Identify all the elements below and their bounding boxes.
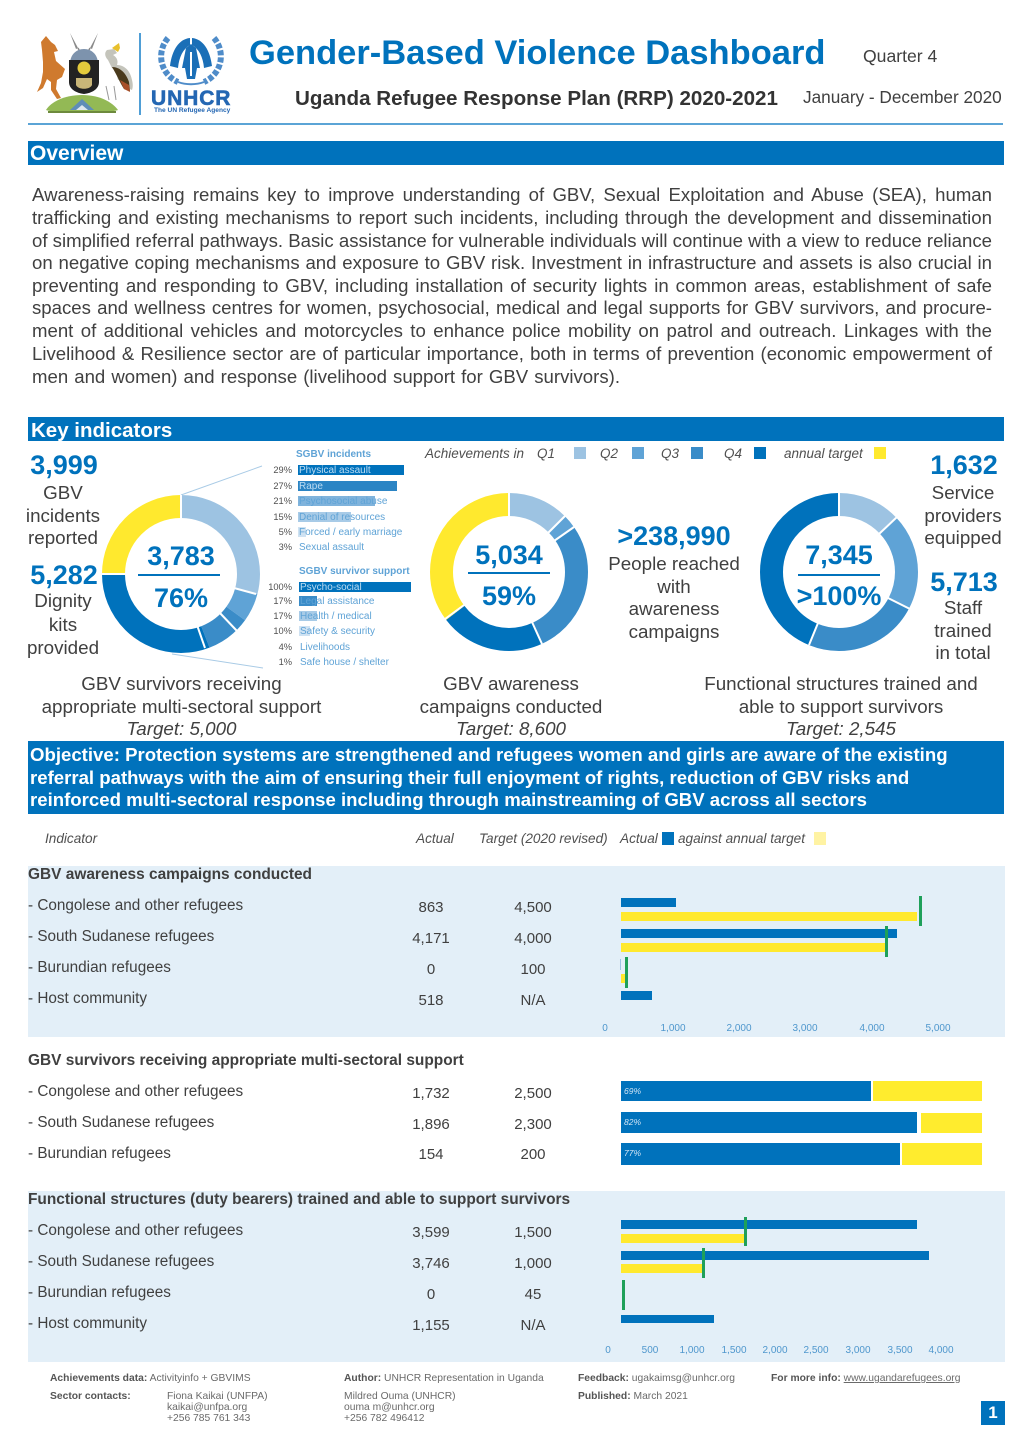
table rows: - Burundian refugees xyxy=(28,1145,171,1162)
footer: Author: UNHCR Representation in Uganda xyxy=(344,1373,544,1384)
footer: Achievements data: Activityinfo + GBVIMS xyxy=(50,1373,251,1384)
donut 1 centre values: 3,783 xyxy=(147,541,215,571)
bar chart: 500 xyxy=(642,1345,658,1356)
left stat: GBV incidents: 3,999 xyxy=(30,450,98,480)
caption: survivors: appropriate multi-sectoral support xyxy=(42,696,321,717)
overview text: preventing and responding to GBV, including installation of security lights in common areas, establishment of safe xyxy=(32,274,992,296)
stat: people reached: People reached xyxy=(608,553,740,574)
bar list: SGBV incidents: Sexual assault xyxy=(299,542,364,553)
table rows: 1,155 xyxy=(412,1317,450,1334)
table rows: N/A xyxy=(520,992,546,1009)
right stat: service providers: 1,632 xyxy=(930,450,998,480)
caption: campaigns xyxy=(420,673,602,739)
left stat: dignity kits: 5,282 xyxy=(30,560,98,590)
donut 3 centre values: 7,345 xyxy=(805,540,873,570)
table header xyxy=(45,831,826,846)
table rows: 4,500 xyxy=(514,899,552,916)
donut 1 centre values xyxy=(138,541,220,613)
table rows: - Congolese and other refugees xyxy=(28,897,243,914)
legend: achievements: Q4 xyxy=(724,446,742,461)
table rows: - South Sudanese refugees xyxy=(28,1114,214,1131)
bar list: SGBV survivor support: 1% xyxy=(279,657,292,667)
table rows: 1,732 xyxy=(412,1085,450,1102)
footer: Fiona Kaikai (UNFPA) xyxy=(167,1391,268,1402)
table rows: 4,171 xyxy=(412,930,450,947)
legend: achievements: annual target xyxy=(784,446,863,461)
donut 1 centre values: 76% xyxy=(154,583,208,613)
table rows xyxy=(28,1222,552,1334)
left stat: GBV incidents xyxy=(26,450,100,548)
donut 2 centre values xyxy=(468,540,550,611)
bar list: SGBV incidents: 3% xyxy=(279,542,292,552)
panel: GBV awareness campaigns xyxy=(28,866,1005,1037)
right stat: staff trained: Staff xyxy=(944,597,982,618)
bar list: SGBV incidents: Physical assault xyxy=(299,465,371,476)
donut 3 centre values xyxy=(797,540,881,611)
donut chart: functional structures xyxy=(760,493,918,651)
right stat: staff trained: in total xyxy=(935,642,991,663)
bar list: SGBV incidents: 29% xyxy=(273,465,292,475)
bar list: SGBV survivor support xyxy=(268,566,411,668)
footer: Published: March 2021 xyxy=(578,1391,688,1402)
objective banner: Objective: Protection systems are strengthened and refugees women and girls are aware of the existing xyxy=(30,744,948,765)
left stat: dignity kits xyxy=(27,560,99,658)
donut 3 centre values: >100% xyxy=(797,581,881,611)
bar chart: 1,000 xyxy=(660,1023,686,1034)
logo: UNHCR xyxy=(151,36,231,114)
bar list: SGBV incidents: 21% xyxy=(273,496,292,506)
bar list: SGBV survivor support: SGBV survivor support xyxy=(299,566,410,577)
overview heading: Overview xyxy=(30,142,123,165)
donut 2 centre values: 5,034 xyxy=(475,540,543,570)
donut chart: awareness campaigns xyxy=(430,493,588,651)
legend: achievements: Q2 xyxy=(600,446,618,461)
caption: structures: able to support survivors xyxy=(739,696,943,717)
bar chart: 3,500 xyxy=(887,1345,913,1356)
left stat: GBV incidents: reported xyxy=(28,527,98,548)
table rows: 45 xyxy=(525,1286,541,1303)
logo tagline: The UN Refugee Agency xyxy=(154,107,230,114)
right stat: service providers xyxy=(924,450,1002,548)
footer xyxy=(50,1373,960,1424)
overview text: men and women) and response (livelihood support for GBV survivors). xyxy=(32,366,620,387)
table rows: 100 xyxy=(520,961,546,978)
period: January - December 2020 xyxy=(803,87,1002,107)
bar list: SGBV incidents: Forced / early marriage xyxy=(299,527,402,538)
left stat: GBV incidents: incidents xyxy=(26,505,100,526)
right stat: service providers: Service xyxy=(932,482,994,503)
footer: +256 785 761 343 xyxy=(167,1413,250,1424)
bar chart: 3,000 xyxy=(792,1023,818,1034)
table rows: 2,300 xyxy=(514,1116,552,1133)
left stat: dignity kits: Dignity xyxy=(34,590,92,611)
table rows: 0 xyxy=(427,1286,435,1303)
bar list: SGBV survivor support: Health / medical xyxy=(300,611,372,622)
bar chart: 4,000 xyxy=(928,1345,954,1356)
bar chart: 2,000 xyxy=(762,1345,788,1356)
bar chart: 0 xyxy=(605,1345,611,1356)
overview text: of simplified referral pathways. Basic assistance for vulnerable individuals will continue with a view to reduce reliance xyxy=(32,230,992,250)
key indicators heading xyxy=(28,417,1004,441)
table rows: 4,000 xyxy=(514,930,552,947)
bar list: SGBV survivor support: 100% xyxy=(268,582,292,592)
objective banner: referral pathways with the aim of ensuring their full enjoyment of rights, reduction of GBV risks and xyxy=(30,766,909,788)
bar chart: 3,000 xyxy=(845,1345,871,1356)
table rows: 863 xyxy=(418,899,444,916)
table rows: 200 xyxy=(520,1146,546,1163)
title: Gender-Based Violence Dashboard xyxy=(249,34,825,72)
bar chart xyxy=(621,1081,982,1165)
bar chart xyxy=(602,896,951,1034)
table rows xyxy=(28,897,552,1009)
logo: Uganda coat of arms xyxy=(37,33,133,113)
bar list: SGBV survivor support: 4% xyxy=(279,642,292,652)
table rows: - Host community xyxy=(28,990,147,1007)
table rows: 1,000 xyxy=(514,1255,552,1272)
bar list: SGBV incidents: 5% xyxy=(279,527,292,537)
bar list: SGBV survivor support: Safe house / shelter xyxy=(300,657,389,668)
bar list: SGBV survivor support: 17% xyxy=(273,611,292,621)
left stat: GBV incidents: GBV xyxy=(43,482,83,503)
legend: achievements: Q3 xyxy=(661,446,679,461)
footer: +256 782 496412 xyxy=(344,1413,424,1424)
footer: For more info: www.ugandarefugees.org xyxy=(771,1373,960,1384)
table rows: 2,500 xyxy=(514,1085,552,1102)
overview text: trafficking and existing mechanisms to report such incidents, including through the development and dissemination xyxy=(32,206,992,228)
footer: ouma m@unhcr.org xyxy=(344,1402,435,1413)
overview text: ment of additional vehicles and motorcycles to enhance police mobility on patrol and outreach. Linkages with the xyxy=(32,320,992,341)
overview text: on negative coping mechanisms and exposure to GBV risk. Investment in infrastructure and assets is also crucial in xyxy=(32,252,992,273)
footer: Mildred Ouma (UNHCR) xyxy=(344,1391,456,1402)
table rows: - Congolese and other refugees xyxy=(28,1083,243,1100)
panel: GBV survivors support xyxy=(28,1052,982,1165)
bar chart: 5,000 xyxy=(925,1023,951,1034)
table rows: - Congolese and other refugees xyxy=(28,1222,243,1239)
quarter: Quarter 4 xyxy=(863,46,937,66)
table rows: - Burundian refugees xyxy=(28,959,171,976)
table rows: - Host community xyxy=(28,1315,147,1332)
objective banner: reinforced multi-sectoral response including through mainstreaming of GBV across all sectors xyxy=(30,789,867,810)
callout lines xyxy=(172,466,263,668)
bar list: SGBV survivor support: Psycho-social xyxy=(300,582,362,593)
caption: survivors: Target: 5,000 xyxy=(126,718,236,739)
stat: people reached: with xyxy=(657,576,691,597)
bar chart: 69% xyxy=(624,1086,641,1096)
caption: structures: Functional structures trained and xyxy=(704,673,978,694)
table header: Indicator xyxy=(45,831,97,846)
stat: people reached: campaigns xyxy=(629,621,719,642)
bar chart: 4,000 xyxy=(859,1023,885,1034)
section heading: GBV awareness campaigns conducted xyxy=(28,866,312,883)
caption: survivors xyxy=(42,673,322,739)
right stat: service providers: equipped xyxy=(924,527,1002,548)
table rows xyxy=(28,1083,552,1163)
section heading: GBV survivors receiving appropriate multi-sectoral support xyxy=(28,1052,464,1069)
table rows: 3,599 xyxy=(412,1224,450,1241)
bar list: SGBV incidents: Psychosocial abuse xyxy=(299,496,387,507)
bar list: SGBV incidents xyxy=(273,449,404,553)
right stat: staff trained: trained xyxy=(934,620,992,641)
bar list: SGBV incidents: Denial of resources xyxy=(299,512,385,523)
table rows: 1,896 xyxy=(412,1116,450,1133)
caption: survivors: GBV survivors receiving xyxy=(81,673,282,694)
bar list: SGBV survivor support: 17% xyxy=(273,596,292,606)
caption: structures xyxy=(704,673,978,739)
table header: against annual target xyxy=(678,831,805,846)
bar list: SGBV incidents: SGBV incidents xyxy=(296,449,371,460)
table header: Actual xyxy=(620,831,658,846)
bar chart: 82% xyxy=(624,1117,641,1127)
footer: kaikai@unfpa.org xyxy=(167,1402,247,1413)
donut 2 centre values: 59% xyxy=(482,581,536,611)
footer: Feedback: ugakaimsg@unhcr.org xyxy=(578,1373,735,1384)
divider xyxy=(139,33,141,115)
overview text xyxy=(32,184,992,387)
bar list: SGBV survivor support: Livelihoods xyxy=(300,642,350,653)
right stat: service providers: providers xyxy=(924,505,1002,526)
header xyxy=(37,33,1002,115)
bar chart: 2,500 xyxy=(803,1345,829,1356)
stat: people reached: >238,990 xyxy=(617,521,731,551)
table rows: - South Sudanese refugees xyxy=(28,1253,214,1270)
left stat: dignity kits: kits xyxy=(49,614,77,635)
table rows: 3,746 xyxy=(412,1255,450,1272)
key indicators heading: Key indicators xyxy=(31,419,172,442)
page number xyxy=(981,1401,1005,1425)
bar chart: 2,000 xyxy=(726,1023,752,1034)
bar list: SGBV incidents: 15% xyxy=(273,512,292,522)
bar list: SGBV survivor support: Legal assistance xyxy=(300,596,374,607)
section heading: Functional structures (duty bearers) trained and able to support survivors xyxy=(28,1191,570,1208)
bar list: SGBV incidents: 27% xyxy=(273,481,292,491)
bar chart: 1,500 xyxy=(721,1345,747,1356)
bar list: SGBV survivor support: Safety & security xyxy=(300,626,375,637)
table rows: - Burundian refugees xyxy=(28,1284,171,1301)
bar list: SGBV incidents: Rape xyxy=(299,481,323,492)
icon: laurel and hands xyxy=(158,36,224,86)
table rows: 518 xyxy=(418,992,444,1009)
bar chart: 77% xyxy=(624,1148,641,1158)
bar chart: 0 xyxy=(602,1023,608,1034)
table rows: 1,500 xyxy=(514,1224,552,1241)
footer: Sector contacts: xyxy=(50,1391,131,1402)
table header: Actual xyxy=(416,831,454,846)
caption: campaigns: campaigns conducted xyxy=(420,696,602,717)
logo wordmark: UNHCR xyxy=(151,87,231,110)
table rows: 154 xyxy=(418,1146,444,1163)
legend: achievements: Achievements in xyxy=(425,446,524,461)
subtitle: Uganda Refugee Response Plan (RRP) 2020-2021 xyxy=(295,87,778,110)
stat: people reached xyxy=(608,521,740,642)
donut chart: survivors support xyxy=(102,495,260,653)
overview text: spaces and wellness centres for women, psychosocial, medical and legal supports for GBV survivors, and procure- xyxy=(32,297,992,318)
bar chart xyxy=(605,1217,954,1356)
caption: campaigns: GBV awareness xyxy=(443,673,579,694)
table rows: N/A xyxy=(520,1317,546,1334)
caption: structures: Target: 2,545 xyxy=(786,718,896,739)
table rows: - South Sudanese refugees xyxy=(28,928,214,945)
stat: people reached: awareness xyxy=(629,598,719,619)
right stat: staff trained: 5,713 xyxy=(930,567,998,597)
left stat: dignity kits: provided xyxy=(27,637,99,658)
objective banner xyxy=(28,741,1004,814)
table rows: 0 xyxy=(427,961,435,978)
overview text: Livelihood & Resilience sector are of particular importance, both in terms of prevention (economic empowerment of xyxy=(32,343,992,364)
overview text: Awareness-raising remains key to improve understanding of GBV, Sexual Exploitation and Abuse (SEA), human xyxy=(32,184,992,205)
right stat: staff trained xyxy=(930,567,998,663)
page number: 1 xyxy=(988,1403,998,1422)
bar list: SGBV survivor support: 10% xyxy=(273,626,292,636)
legend: achievements: Q1 xyxy=(537,446,555,461)
legend: achievements xyxy=(424,446,886,461)
caption: campaigns: Target: 8,600 xyxy=(456,718,566,739)
panel: functional structures xyxy=(28,1191,1005,1362)
table header: Target (2020 revised) xyxy=(479,831,608,846)
bar chart: 1,000 xyxy=(679,1345,705,1356)
overview heading xyxy=(28,141,1004,165)
